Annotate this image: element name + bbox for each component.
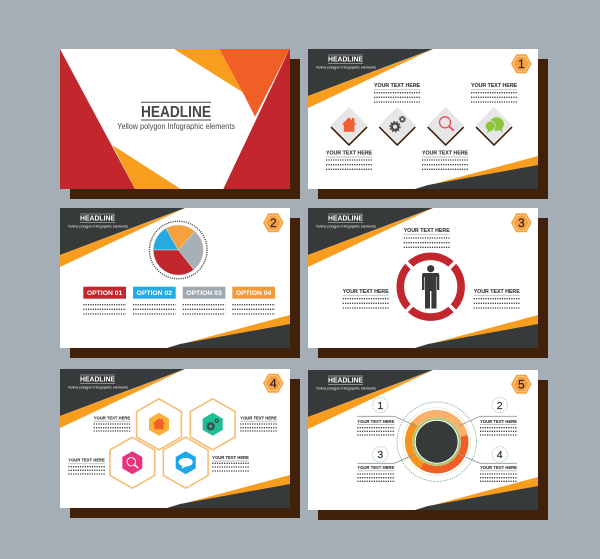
text block upper right: YOUR TEXT HERE <box>480 419 518 425</box>
text block bottom 1: YOUR TEXT HERE <box>326 150 372 156</box>
option 01 <box>83 287 126 314</box>
number circle 2: 2 <box>497 400 503 412</box>
icon: person <box>422 265 439 308</box>
number badge 3 <box>511 213 532 232</box>
text block upper right: YOUR TEXT HERE <box>240 415 277 421</box>
text block lower left: YOUR TEXT HERE <box>68 458 105 464</box>
number badge 5: 5 <box>518 378 525 392</box>
text block lower left <box>68 458 106 474</box>
option 01: OPTION 01 <box>87 290 123 297</box>
segmented red ring <box>400 256 461 317</box>
number badge 3: 3 <box>518 216 525 230</box>
text block top 2 <box>471 83 518 102</box>
bottom right corner shape <box>415 477 538 510</box>
text block lower right <box>480 465 518 481</box>
hexagon: home <box>137 399 181 450</box>
top left corner shape <box>308 370 433 429</box>
top left corner shape: HEADLINE <box>80 214 115 223</box>
bottom right corner shape <box>167 475 290 508</box>
icon: chat diamond <box>476 107 512 145</box>
bottom right corner shape <box>415 315 538 348</box>
donut chart <box>397 402 476 481</box>
panel: slide 4 hexagons <box>60 369 300 518</box>
icon: gears diamond <box>379 107 415 145</box>
text block top <box>404 228 451 247</box>
panel: cover slide <box>60 49 300 199</box>
top left corner shape: Yellow polygon Infographic elements <box>68 386 128 390</box>
panel: slide 1 icons <box>308 49 548 199</box>
text block top: YOUR TEXT HERE <box>404 228 450 234</box>
top left corner shape: Yellow polygon Infographic elements <box>68 224 128 228</box>
text block bottom 2 <box>422 150 469 169</box>
right red polygon <box>223 49 290 189</box>
text block upper left <box>357 419 395 435</box>
top left corner shape: HEADLINE <box>328 214 363 223</box>
text block upper right <box>480 419 518 435</box>
panel: slide 2 pie chart <box>60 208 300 358</box>
panel: slide 3 person <box>308 208 548 358</box>
option 02: OPTION 02 <box>137 290 172 297</box>
text block lower left: YOUR TEXT HERE <box>357 465 395 471</box>
icon: home diamond <box>331 107 367 145</box>
hexagon: search <box>110 437 155 488</box>
number badge 2 <box>263 213 284 232</box>
left red triangle <box>60 49 135 189</box>
top left corner shape: Yellow polygon Infographic elements <box>316 224 376 228</box>
text block upper right <box>240 415 278 431</box>
bottom right corner shape <box>167 315 290 348</box>
number badge 2: 2 <box>270 216 277 230</box>
number circle 4 <box>492 447 507 462</box>
top orange polygon <box>174 49 243 92</box>
number badge 4 <box>263 374 284 393</box>
hexagon: gears <box>190 399 235 450</box>
number circle 4: 4 <box>497 449 503 461</box>
number circle 1: 1 <box>377 400 383 412</box>
top left corner shape: HEADLINE <box>328 376 363 385</box>
cover headline: HEADLINE <box>141 104 211 121</box>
top left corner shape <box>60 208 185 267</box>
text block right <box>474 289 521 308</box>
top left corner shape: HEADLINE <box>80 375 115 384</box>
text block bottom 1 <box>326 150 373 169</box>
option 02 <box>133 287 176 314</box>
text block left <box>343 289 390 308</box>
icon: search diamond <box>428 107 464 145</box>
number circle 2 <box>492 397 507 413</box>
panel: slide 5 donut <box>308 370 548 520</box>
text block upper left: YOUR TEXT HERE <box>94 415 131 421</box>
text block lower right <box>212 455 250 471</box>
number badge 5 <box>511 375 532 394</box>
text block top 1 <box>374 83 421 102</box>
text block bottom 2: YOUR TEXT HERE <box>422 150 468 156</box>
text block lower right: YOUR TEXT HERE <box>480 465 518 471</box>
number circle 3 <box>373 447 388 462</box>
number circle 3: 3 <box>377 449 383 461</box>
number badge 1: 1 <box>518 57 525 71</box>
text block lower right: YOUR TEXT HERE <box>212 455 249 461</box>
text block lower left <box>357 465 395 481</box>
top left corner shape <box>308 208 433 267</box>
text block upper left: YOUR TEXT HERE <box>357 419 395 425</box>
text block right: YOUR TEXT HERE <box>474 289 520 295</box>
top orange-red polygon <box>219 49 290 117</box>
number badge 1 <box>511 54 532 73</box>
top left corner shape: Yellow polygon Infographic elements <box>316 66 376 70</box>
text block upper left <box>94 415 131 431</box>
text block top 2: YOUR TEXT HERE <box>471 83 517 89</box>
text block left: YOUR TEXT HERE <box>343 289 389 295</box>
bottom right corner shape <box>415 156 538 189</box>
option 04 <box>232 287 275 314</box>
top left corner shape <box>60 369 185 428</box>
option 04: OPTION 04 <box>236 290 272 297</box>
pie chart <box>150 221 207 279</box>
connector lines <box>357 416 517 463</box>
number badge 4: 4 <box>270 377 277 391</box>
top left corner shape: HEADLINE <box>328 55 363 64</box>
bottom orange triangle <box>112 145 181 189</box>
top left corner shape: Yellow polygon Infographic elements <box>316 386 376 390</box>
hexagon: chat <box>163 437 208 488</box>
option 03: OPTION 03 <box>186 290 222 297</box>
option 03 <box>183 287 225 314</box>
text block top 1: YOUR TEXT HERE <box>374 83 420 89</box>
top left corner shape <box>308 49 433 108</box>
number circle 1 <box>373 397 388 413</box>
cover subtitle: Yellow polygon Infographic elements <box>117 122 235 131</box>
